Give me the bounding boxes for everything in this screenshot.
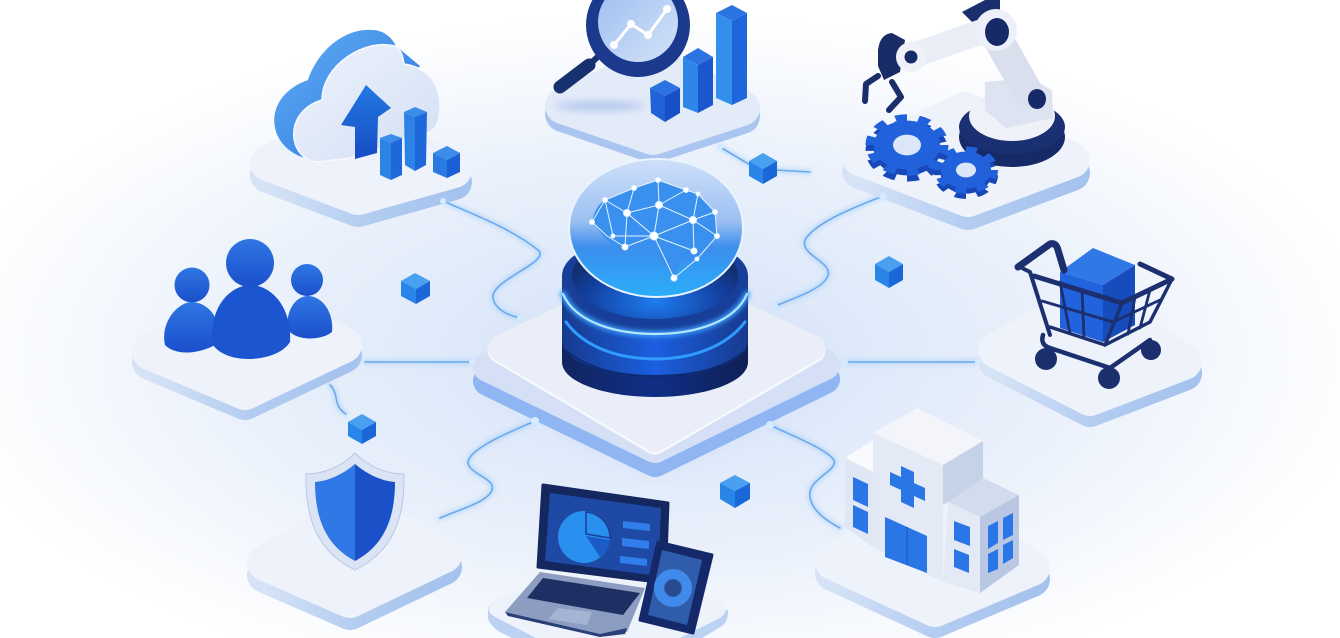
floating cube: right	[875, 256, 903, 288]
floating cube: bottom	[720, 475, 750, 508]
glass dome	[569, 159, 743, 297]
basket	[1018, 244, 1172, 368]
panel: people platform	[150, 300, 344, 402]
pie chart	[558, 511, 610, 563]
elbow	[975, 9, 1017, 51]
icon: shopping cart	[1018, 244, 1172, 389]
panel: hospital platform	[833, 510, 1032, 620]
panel: robot platform	[860, 110, 1072, 212]
small gear	[938, 149, 994, 196]
panel: analytics platform	[555, 65, 742, 145]
gripper	[865, 76, 901, 110]
cube	[433, 146, 460, 178]
keyboard	[527, 578, 640, 615]
icon: magnifier and bars	[560, 0, 747, 122]
upper rim	[562, 236, 748, 336]
connector nodes	[440, 144, 981, 429]
floating cube: top right	[749, 153, 777, 184]
lens	[586, 0, 690, 77]
back cloud	[274, 30, 420, 160]
windows	[954, 513, 1013, 573]
cross	[890, 466, 925, 508]
panel: central platform	[488, 275, 825, 465]
icon: shield	[306, 453, 404, 570]
tall bar	[716, 5, 747, 105]
icon: laptop and tablet	[505, 485, 712, 637]
tablet	[640, 542, 712, 633]
panel: laptop platform	[488, 548, 728, 638]
box	[1060, 248, 1135, 285]
right wing	[948, 478, 1019, 517]
mid bar	[683, 48, 713, 113]
cylinder base	[562, 280, 748, 397]
base	[959, 107, 1065, 167]
shoulder mount	[985, 78, 1053, 128]
floating cube: left top	[401, 273, 430, 304]
large gear	[870, 118, 944, 178]
icon: AI brain server	[562, 159, 748, 397]
legend lines	[620, 521, 650, 566]
glow rings	[563, 294, 747, 376]
blue band	[562, 290, 748, 376]
tall bar	[404, 107, 427, 171]
short bar	[380, 134, 402, 180]
door	[885, 517, 927, 573]
brain	[592, 180, 717, 278]
panel: cloud platform	[268, 122, 454, 209]
icon: cloud upload	[274, 30, 460, 180]
magnifier shadow	[555, 101, 645, 111]
upper link	[912, 28, 992, 56]
panel: shopping platform	[996, 300, 1184, 409]
top link	[962, 0, 1000, 25]
icon: people	[164, 239, 332, 359]
left wing	[845, 440, 880, 472]
handle	[560, 52, 603, 87]
screen	[538, 485, 668, 583]
tablet donut	[659, 574, 687, 602]
icon: hospital	[845, 408, 1019, 593]
brain network	[590, 178, 720, 281]
touchpad	[548, 608, 592, 625]
floating cube: lower left	[348, 414, 376, 444]
laptop base	[505, 572, 645, 637]
far wheel	[1141, 340, 1161, 360]
connectors	[330, 147, 978, 528]
rim recess	[572, 233, 738, 319]
wheels	[1035, 348, 1120, 389]
lower link	[994, 32, 1028, 92]
arrow	[341, 85, 391, 159]
chart line	[610, 5, 671, 49]
main tower	[873, 408, 983, 465]
wrist	[878, 33, 905, 80]
shoulder pin	[1028, 89, 1046, 109]
icon: robot arm	[865, 0, 1065, 196]
panel: shield platform	[265, 510, 444, 612]
front cloud	[294, 45, 440, 162]
short bar	[650, 80, 680, 122]
